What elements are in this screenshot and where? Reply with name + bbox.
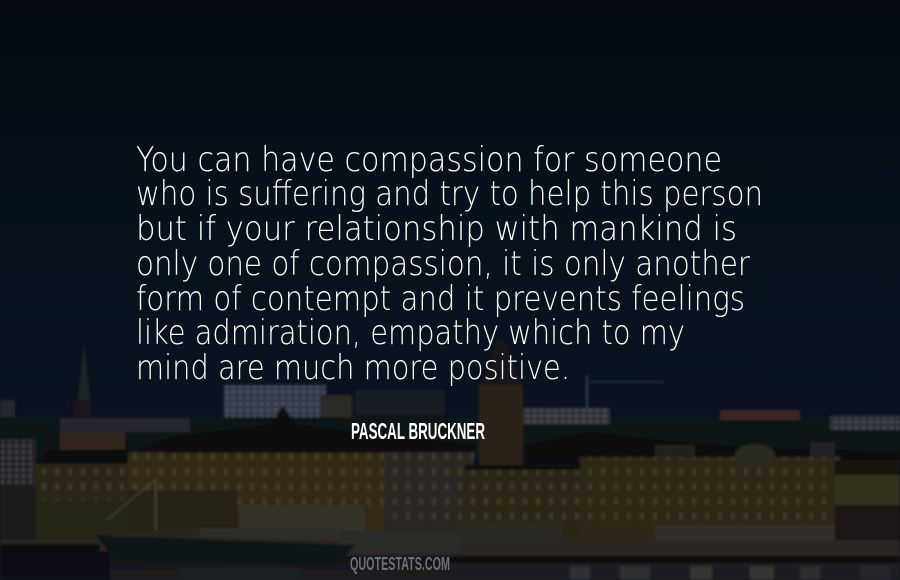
- background: city skyline and waterfront: [0, 340, 900, 580]
- quote line 6: like admiration, empathy which to my: [136, 313, 685, 353]
- far left building: [0, 440, 36, 542]
- middle building: [128, 445, 385, 540]
- quote line 1: You can have compassion for someone: [136, 140, 722, 180]
- quote text: [136, 140, 763, 388]
- water: [0, 551, 900, 580]
- centre building: [462, 465, 592, 545]
- tree line: [130, 406, 900, 462]
- construction crane: [586, 375, 664, 410]
- left building: [35, 449, 152, 540]
- author name: PASCAL BRUCKNER: [351, 418, 485, 444]
- quote line 4: only one of compassion, it is only another: [136, 244, 750, 284]
- sailing ship: [95, 480, 356, 566]
- quote line 5: form of contempt and it prevents feelings: [136, 279, 745, 319]
- clock tower: [479, 340, 523, 470]
- far right building: [835, 460, 900, 543]
- watermark: QUOTESTATS.COM: [350, 554, 450, 574]
- church spire: [73, 343, 91, 422]
- quay: [0, 530, 900, 563]
- quote line 7: mind are much more positive.: [136, 348, 570, 388]
- buildings left of the tower: [384, 452, 474, 540]
- quote line 2: who is suffering and try to help this person: [136, 174, 763, 214]
- large right building: [580, 442, 845, 547]
- far skyline band: [0, 400, 900, 457]
- quote line 3: but if your relationship with mankind is: [136, 209, 737, 249]
- distant high-rises: [224, 385, 445, 420]
